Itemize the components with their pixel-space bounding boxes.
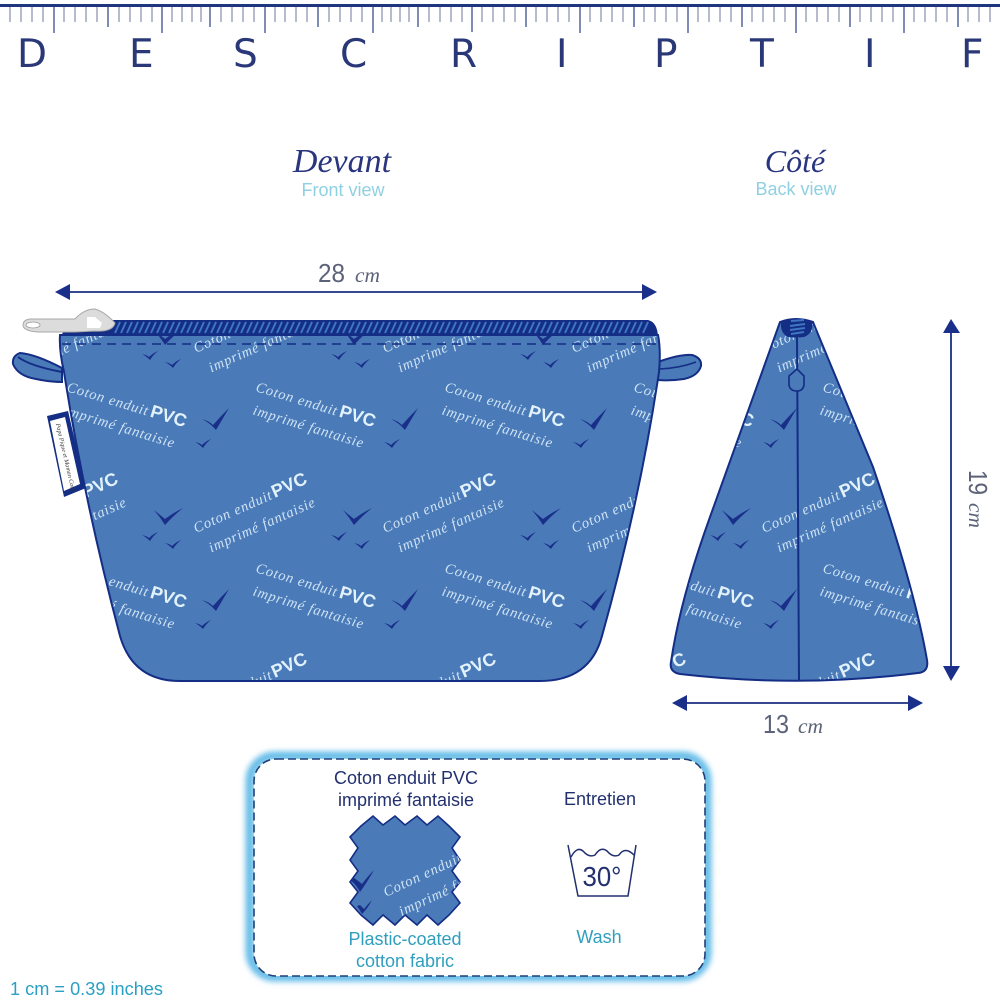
- fabric pattern: imprimé fantaisie: [206, 495, 318, 556]
- sewn label: [47, 411, 86, 497]
- fabric pattern: imprimé fantaisie: [395, 495, 507, 556]
- fabric pattern: imprimé fantaisie: [584, 315, 696, 376]
- dimension: depth 13 cm: [672, 695, 923, 739]
- fabric pattern: imprimé fantaisie: [251, 403, 366, 452]
- fabric pattern: PVC: [79, 468, 121, 502]
- fabric heading: imprimé fantaisie: [338, 790, 474, 810]
- side fabric pattern: Coton enduit: [632, 561, 718, 601]
- fabric pattern: imprimé fantaisie: [17, 495, 129, 556]
- title: C: [340, 32, 367, 77]
- side fabric pattern: Coton enduit: [570, 667, 654, 717]
- side fabric pattern: imprimé fantaisie: [629, 403, 744, 452]
- fabric pattern: Coton enduit: [569, 307, 653, 357]
- fabric pattern: Coton enduit: [443, 380, 529, 420]
- dimension: depth 13 cm: 13: [763, 709, 789, 739]
- fabric pattern: Coton enduit: [191, 667, 275, 717]
- title: S: [233, 32, 258, 77]
- fabric pattern: PVC: [337, 582, 378, 612]
- fabric pattern: PVC: [268, 648, 310, 682]
- side fabric pattern: Coton enduit: [759, 667, 843, 717]
- fabric pattern: PVC: [268, 468, 310, 502]
- title: P: [654, 32, 678, 77]
- title: I: [864, 32, 876, 77]
- fabric heading: Coton enduit PVC: [334, 768, 478, 788]
- fabric pattern: imprimé fantaisie: [17, 315, 129, 376]
- pouch body: [60, 335, 660, 681]
- side fabric pattern: imprimé fantaisie: [629, 584, 744, 633]
- side fabric pattern: Coton enduit: [759, 487, 843, 537]
- fabric pattern: Coton enduit: [191, 487, 275, 537]
- title: E: [129, 32, 154, 77]
- fabric pattern: PVC: [79, 288, 121, 322]
- title: I: [556, 32, 568, 77]
- side fabric pattern: PVC: [715, 401, 756, 431]
- fabric pattern: PVC: [148, 401, 189, 431]
- dimension: height 19 cm: [943, 319, 993, 681]
- fabric swatch: Coton enduit: [381, 850, 465, 901]
- side seam: [797, 335, 799, 680]
- heading: front view: Front view: [301, 180, 386, 200]
- fabric pattern: imprimé fantaisie: [584, 495, 696, 556]
- fabric pattern: [0, 288, 756, 717]
- fabric pattern: PVC: [526, 401, 567, 431]
- care caption: Wash: [576, 927, 622, 947]
- side fabric pattern: PVC: [836, 648, 878, 682]
- side zipper end: [781, 319, 812, 338]
- fabric pattern: Coton enduit: [2, 307, 86, 357]
- fabric pattern: PVC: [715, 401, 756, 431]
- title: R: [450, 32, 477, 77]
- care heading: Entretien: [564, 789, 636, 809]
- dimension: width 28 cm: [55, 258, 657, 300]
- fabric pattern: Coton enduit: [380, 667, 464, 717]
- dimension: width 28 cm: 28: [318, 258, 345, 288]
- fabric pattern: PVC: [457, 648, 499, 682]
- dimension: height 19 cm: 19: [963, 470, 993, 495]
- heading: front view: [292, 143, 393, 200]
- icon: wash 30 degrees: [568, 845, 636, 896]
- side fabric pattern: imprimé fantaisie: [774, 495, 886, 556]
- fabric pattern: PVC: [646, 468, 688, 502]
- side fabric pattern: imprimé fantaisie: [818, 584, 933, 633]
- side fabric pattern: Coton enduit: [759, 307, 843, 357]
- title: F: [961, 32, 983, 77]
- right loop: [658, 355, 701, 380]
- fabric pattern: Coton enduit: [632, 380, 718, 420]
- fabric pattern: Coton enduit: [443, 561, 529, 601]
- side fabric pattern: imprimé fantaisie: [818, 403, 933, 452]
- title: [17, 32, 983, 77]
- side zipper slider: [789, 369, 804, 391]
- fabric pattern: imprimé fantaisie: [395, 315, 507, 376]
- fabric pattern: imprimé fantaisie: [62, 403, 177, 452]
- side fabric pattern: PVC: [715, 582, 756, 612]
- fabric pattern: Coton enduit: [569, 487, 653, 537]
- dimension: depth 13 cm: cm: [798, 714, 823, 738]
- heading: side view: Back view: [755, 179, 838, 199]
- title: T: [749, 32, 774, 77]
- side fabric pattern: PVC: [836, 468, 878, 502]
- fabric pattern: PVC: [148, 582, 189, 612]
- fabric pattern: PVC: [268, 288, 310, 322]
- fabric pattern: imprimé fantaisie: [629, 403, 744, 452]
- side fabric pattern: Coton enduit: [632, 380, 718, 420]
- side fabric pattern: Coton enduit: [821, 561, 907, 601]
- fabric pattern: PVC: [457, 468, 499, 502]
- fabric pattern: imprimé fantaisie: [440, 584, 555, 633]
- dimension: width 28 cm: cm: [355, 263, 380, 287]
- ruler: [0, 4, 1000, 33]
- heading: side view: Côté: [765, 143, 827, 179]
- fabric pattern: Coton enduit: [380, 307, 464, 357]
- fabric caption: Plastic-coated: [348, 929, 462, 949]
- side view pouch: [670, 318, 928, 682]
- side fabric pattern: PVC: [904, 582, 945, 612]
- fabric pattern: PVC: [526, 582, 567, 612]
- fabric pattern: imprimé fantaisie: [206, 315, 318, 376]
- side fabric pattern: PVC: [647, 648, 689, 682]
- zipper band: [62, 320, 658, 336]
- fabric pattern: PVC: [646, 288, 688, 322]
- dimension: height 19 cm: cm: [964, 503, 988, 528]
- fabric pattern: Coton enduit: [65, 380, 151, 420]
- front view pouch: [12, 308, 702, 682]
- fabric pattern: Coton enduit: [254, 380, 340, 420]
- sewn label: Papa Pique et Maman Coud: [54, 422, 77, 494]
- heading: front view: Devant: [292, 143, 393, 180]
- fabric pattern: PVC: [457, 288, 499, 322]
- fabric caption: cotton fabric: [356, 951, 454, 971]
- side fabric pattern: Coton enduit: [821, 380, 907, 420]
- fabric pattern: imprimé fantaisie: [440, 403, 555, 452]
- heading: side view: [755, 143, 838, 199]
- fabric pattern: Coton enduit: [254, 561, 340, 601]
- fabric pattern: Coton enduit: [380, 487, 464, 537]
- side body: [671, 319, 927, 681]
- fabric pattern: Coton enduit: [191, 307, 275, 357]
- fabric swatch: imprimé fantaisie: [397, 857, 508, 920]
- fabric pattern: Coton enduit: [2, 487, 86, 537]
- zipper pull: [23, 309, 115, 332]
- fabric pattern: imprimé fantaisie: [251, 584, 366, 633]
- side fabric pattern: [672, 324, 919, 680]
- side fabric pattern: PVC: [904, 401, 945, 431]
- icon: wash 30 degrees: 30°: [582, 861, 622, 892]
- panel: fabric and care: [250, 756, 707, 977]
- fabric pattern: PVC: [337, 401, 378, 431]
- left loop: [13, 353, 62, 382]
- title: D: [17, 32, 47, 77]
- side fabric pattern: imprimé fantaisie: [774, 315, 886, 376]
- fabric pattern: imprimé fantaisie: [62, 584, 177, 633]
- fabric swatch: [349, 815, 461, 926]
- fabric pattern: Coton enduit: [65, 561, 151, 601]
- unit conversion note: 1 cm = 0.39 inches: [10, 979, 163, 999]
- side fabric pattern: PVC: [836, 288, 878, 322]
